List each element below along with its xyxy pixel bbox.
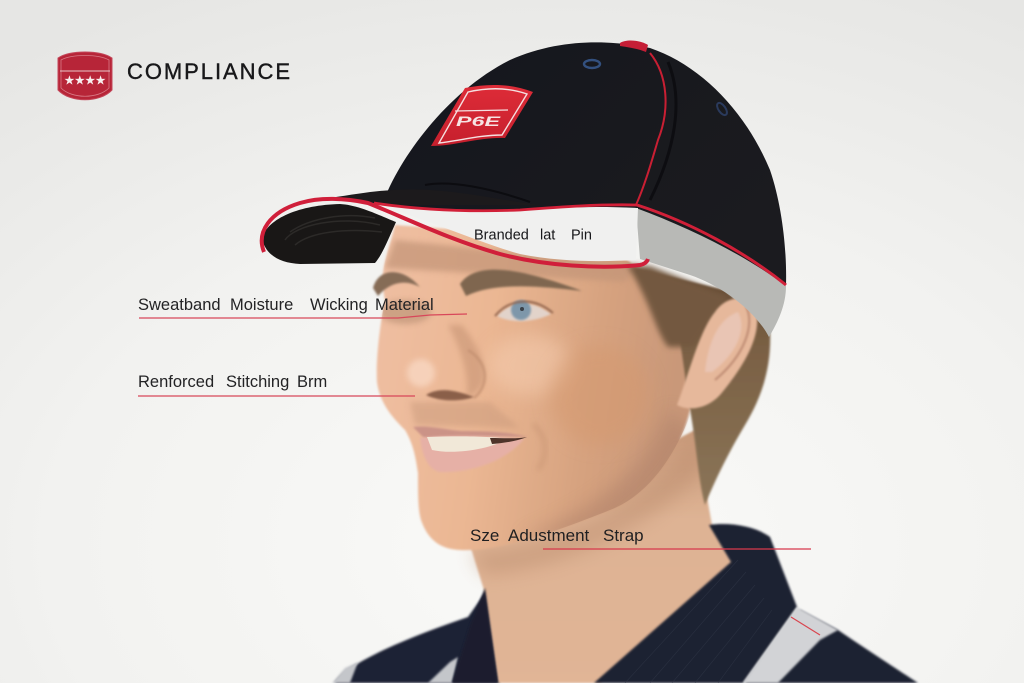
brow near nose	[373, 272, 420, 296]
smile line	[533, 424, 545, 470]
jaw shadow	[534, 416, 690, 536]
ear	[677, 298, 757, 408]
under-jaw shadow	[470, 430, 705, 575]
callout: strap	[470, 526, 811, 549]
nose bridge shading	[448, 325, 485, 397]
shirt left grey stripes	[332, 657, 458, 683]
white front band	[372, 203, 638, 261]
neck	[470, 430, 735, 683]
under brim	[262, 204, 396, 264]
front badge	[431, 85, 533, 146]
collar ribbing	[625, 560, 772, 683]
band red piping	[637, 205, 786, 285]
brim crease	[425, 184, 530, 202]
icon: shield with stars	[58, 52, 112, 100]
collar right	[594, 524, 797, 683]
panel shadow	[650, 62, 676, 200]
callout: sweatband: Moisture	[230, 296, 293, 314]
panel seam	[636, 53, 666, 205]
brim red edge	[262, 199, 648, 267]
forehead shadow	[385, 240, 640, 282]
mouth corner	[490, 437, 527, 444]
callout: sweatband: Wicking	[310, 296, 368, 314]
eye	[495, 300, 553, 321]
shirt left shoulder	[335, 590, 500, 683]
nose highlight	[407, 359, 435, 387]
under brim stitching	[285, 216, 382, 245]
heading: COMPLIANCE	[127, 59, 290, 84]
callout: strap: Sze	[470, 526, 499, 545]
eyelet front	[584, 60, 600, 68]
badge text: P6E	[456, 113, 501, 129]
upper lip shadow	[410, 402, 520, 428]
nose wing	[468, 350, 485, 398]
infographic: cap anatomy	[58, 40, 918, 683]
callout: strap: Strap	[603, 526, 644, 545]
face	[373, 225, 700, 550]
collar left	[452, 588, 498, 683]
hair back	[610, 262, 770, 505]
callout: sweatband: Material	[375, 296, 434, 314]
callout: stitching: Stitching	[226, 373, 289, 391]
callout: stitching: Renforced	[138, 373, 214, 391]
callout: strap: Adustment	[508, 526, 590, 545]
callout: stitching	[138, 373, 415, 396]
logo: compliance	[58, 52, 290, 100]
callout: branded hat pin: lat	[540, 228, 555, 244]
callout: branded hat pin: Branded	[474, 228, 529, 244]
crown	[382, 42, 786, 285]
sideburn hair	[627, 265, 730, 347]
brim top	[330, 189, 540, 205]
mouth	[413, 427, 528, 472]
nostril	[426, 390, 474, 401]
cap	[262, 41, 786, 337]
shirt right shoulder	[745, 610, 918, 683]
grey side band	[636, 208, 786, 337]
person wearing shirt and cap	[262, 41, 918, 683]
callout: stitching: Brm	[297, 373, 327, 391]
eye socket shadow	[379, 300, 431, 324]
collar reflective stripe	[743, 607, 838, 683]
brow over eye	[460, 270, 582, 296]
callout: branded hat pin: Pin	[571, 228, 592, 244]
icon: shield with stars: ★★★★	[64, 75, 106, 87]
cheek flush	[548, 354, 612, 430]
front band red top piping	[374, 203, 637, 211]
top button	[620, 41, 648, 52]
callout: sweatband: Sweatband	[138, 296, 221, 314]
eyelet side	[715, 101, 729, 117]
cheek glow	[488, 335, 572, 395]
callout: sweatband	[138, 296, 467, 318]
